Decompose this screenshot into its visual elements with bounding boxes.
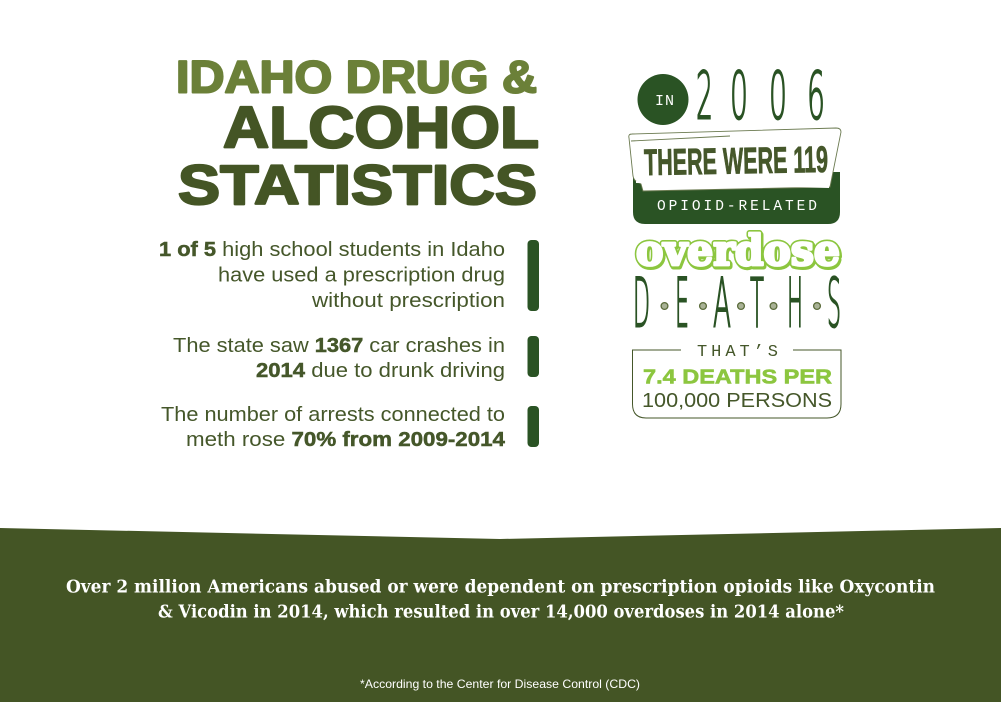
year 2006: 0 <box>730 60 748 134</box>
overdose lettering: overdose <box>636 226 840 275</box>
rate denominator: 100,000 PERSONS <box>642 389 832 412</box>
stat: car crashes: 2014 due to drunk driving <box>256 359 505 382</box>
footer statement: & Vicodin in 2014, which resulted in over 14,000 overdoses in 2014 alone* <box>158 602 844 622</box>
stat: meth arrests: meth rose 70% from 2009-2014 <box>186 428 506 451</box>
bar: prescription stat <box>528 240 539 311</box>
overdose lettering: overdose <box>637 228 841 276</box>
box outline <box>632 350 841 418</box>
footnote: *According to the Center for Disease Control (CDC) <box>360 677 640 691</box>
stat: car crashes: The state saw 1367 car crashes in <box>173 334 505 357</box>
deaths lettering <box>633 264 841 344</box>
that's label: THAT’S <box>697 343 778 362</box>
badge: in: IN <box>655 93 674 110</box>
stat: car crashes <box>173 334 505 382</box>
stat: meth arrests <box>161 403 506 451</box>
infographic canvas: S <box>827 264 841 344</box>
deaths lettering: T <box>750 264 764 344</box>
deaths lettering: D <box>633 264 650 344</box>
rate box <box>632 343 841 418</box>
year 2006 <box>696 60 825 134</box>
bar: car crash stat <box>528 336 539 377</box>
banner paper <box>629 128 841 191</box>
banner: there were 119 opioid-related <box>629 128 841 224</box>
infographic canvas: 6 <box>807 60 825 134</box>
rate figure: 7.4 DEATHS PER <box>643 366 832 388</box>
stat: prescription drug use: without prescription <box>311 289 505 312</box>
stat: prescription drug use <box>159 238 505 312</box>
title: IDAHO DRUG & <box>176 52 537 102</box>
footer statement <box>66 578 935 622</box>
badge: in <box>638 74 688 125</box>
footer statement: Over 2 million Americans abused or were dependent on prescription opioids like Oxycontin <box>66 578 935 598</box>
title <box>176 52 539 216</box>
title: STATISTICS <box>178 153 537 216</box>
deaths lettering: A <box>713 264 731 344</box>
banner base <box>633 172 840 224</box>
banner subline: OPIOID-RELATED <box>657 199 817 215</box>
overdose lettering: overdose <box>636 226 840 275</box>
year 2006: 2 <box>696 60 713 134</box>
deaths lettering: H <box>787 264 803 344</box>
banner headline: THERE WERE 119 <box>644 139 828 183</box>
deaths lettering: E <box>675 264 689 344</box>
footer band <box>0 528 1001 702</box>
stat: prescription drug use: have used a prescription drug <box>218 264 505 286</box>
title: ALCOHOL <box>223 96 539 160</box>
dots between letters <box>661 303 820 309</box>
year 2006: 0 <box>769 60 787 134</box>
bar: meth stat <box>528 406 539 447</box>
stat: prescription drug use: 1 of 5 high school students in Idaho <box>159 238 505 261</box>
stat: meth arrests: The number of arrests connected to <box>161 403 505 426</box>
